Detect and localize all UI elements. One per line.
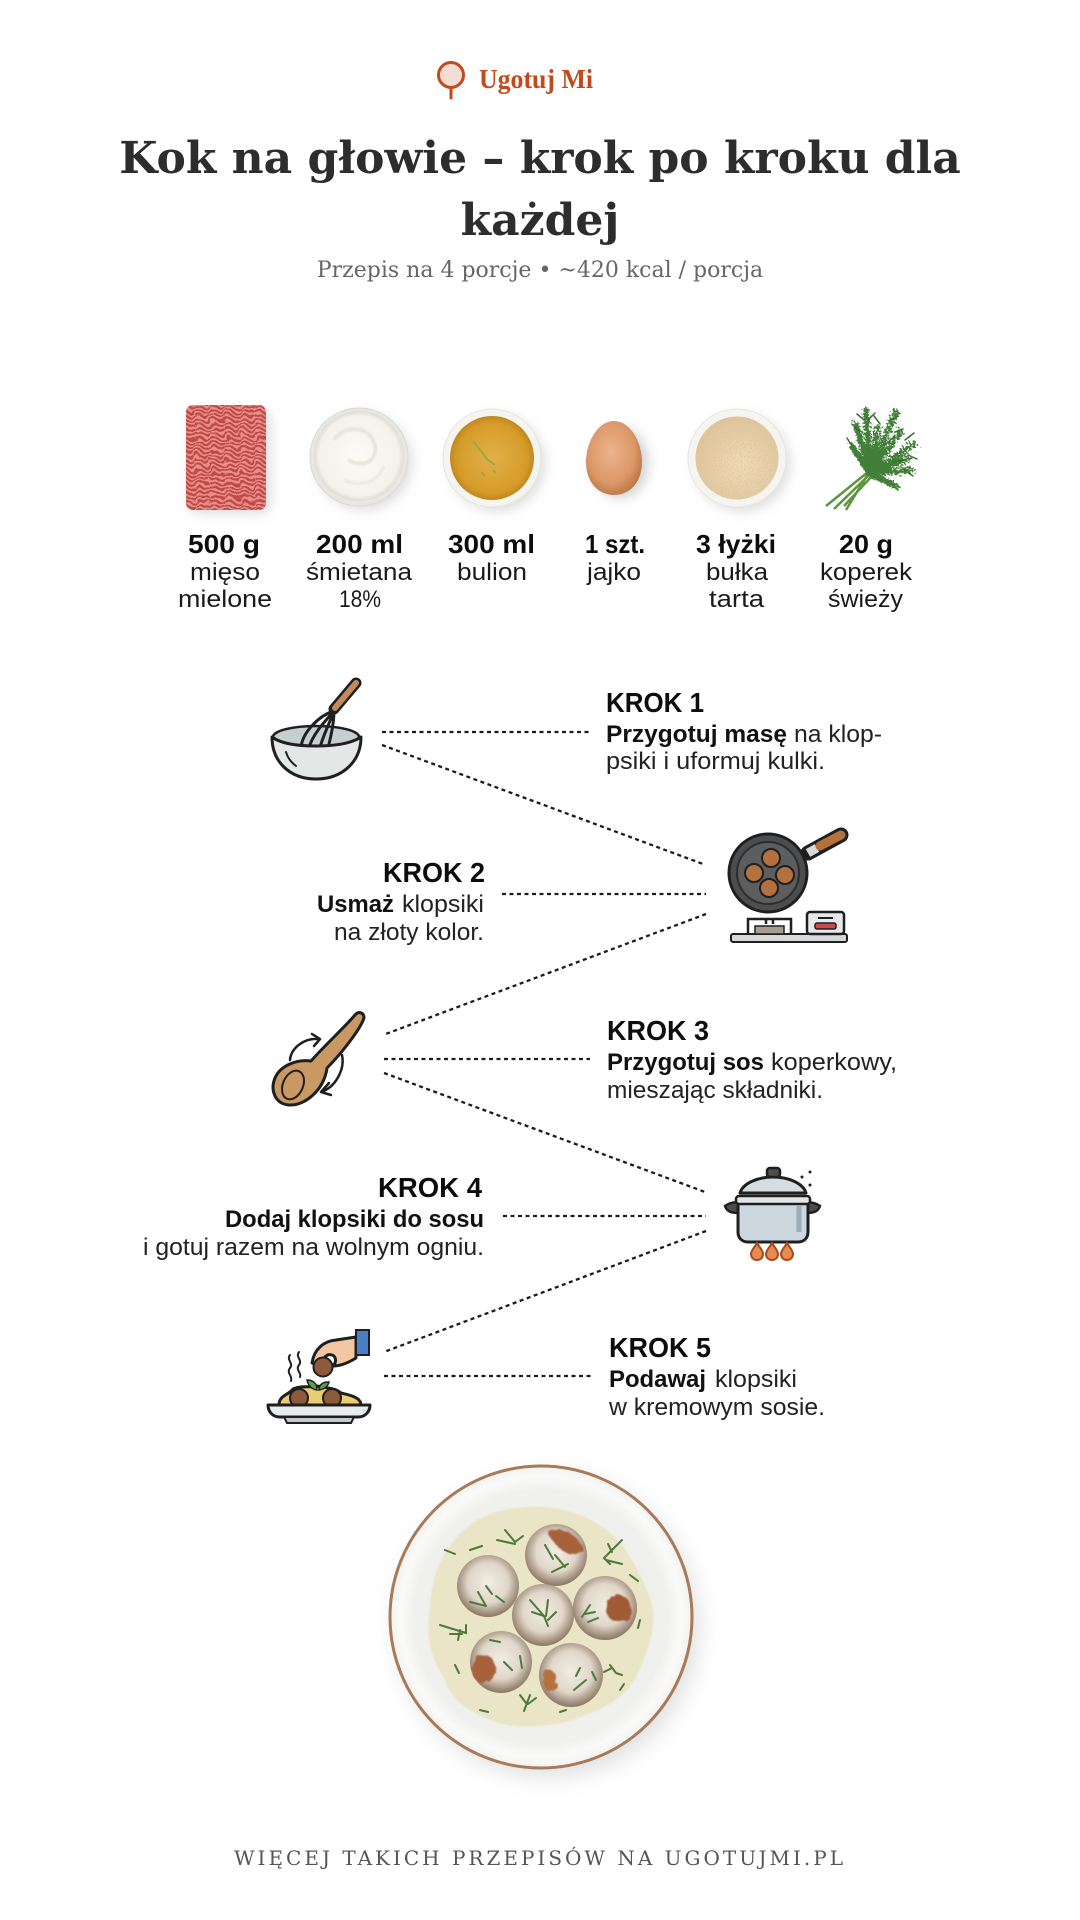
step 1 text: Przygotuj masę: [606, 721, 787, 748]
ingredient: bread crumbs: tarta: [709, 586, 765, 613]
step 4 text: KROK 4: [378, 1172, 482, 1203]
icon: whisk and bowl: [272, 683, 361, 779]
ingredients row: [176, 396, 917, 613]
ingredient: fresh dill: koperek: [820, 559, 913, 586]
step 3 text: KROK 3: [607, 1015, 709, 1046]
step 3: [273, 1013, 897, 1105]
ingredient: egg: 1 szt.: [585, 529, 645, 559]
step 3 text: Przygotuj sos: [607, 1049, 764, 1076]
step 1 text: na klop-: [794, 721, 882, 748]
step 4: [143, 1168, 820, 1261]
step 3 text: mieszając składniki.: [607, 1077, 823, 1104]
ingredient: egg: jajko: [586, 559, 641, 586]
icon: pot over flames: [725, 1168, 820, 1260]
step 5: [268, 1330, 825, 1423]
logo: [438, 62, 593, 98]
step 2 text: Usmaż: [317, 891, 394, 918]
title: [119, 133, 961, 246]
step 2 text: na złoty kolor.: [334, 919, 484, 946]
step 2 text: [317, 857, 485, 946]
footer: WIĘCEJ TAKICH PRZEPISÓW NA UGOTUJMI.PL: [234, 1845, 846, 1870]
ingredient: fresh dill: 20 g: [839, 529, 893, 559]
step 5 text: klopsiki: [715, 1366, 797, 1393]
ingredient: sour cream: śmietana: [306, 559, 413, 586]
icon: hand serving meatball on plate: [268, 1330, 370, 1423]
connector lines: [382, 732, 706, 1376]
title: Kok na głowie – krok po kroku dla: [119, 133, 961, 184]
step 5 text: [608, 1332, 825, 1421]
ingredient: fresh dill: świeży: [828, 586, 903, 613]
ingredient: sour cream: 18%: [339, 586, 381, 613]
step 2 text: KROK 2: [383, 857, 485, 888]
ingredient: bread crumbs: [688, 409, 790, 613]
sauce: [428, 1507, 653, 1726]
subtitle: Przepis na 4 porcje • ~420 kcal / porcja: [317, 258, 763, 283]
step 1 text: KROK 1: [606, 687, 704, 718]
meatballs: [457, 1524, 637, 1707]
step 1 text: psiki i uformuj kulki.: [606, 748, 825, 775]
icon: logo spoon: [438, 62, 464, 98]
ingredient: broth: bulion: [457, 559, 527, 586]
icon: wooden spoon with stirring arrows: [273, 1013, 364, 1105]
ingredient: broth: [443, 409, 545, 586]
step 1 text: [606, 687, 882, 775]
finished dish: meatballs in dill sauce: [390, 1466, 698, 1776]
step 5 text: KROK 5: [609, 1332, 711, 1363]
ingredient: fresh dill: [820, 410, 917, 613]
dill garnish: [440, 1530, 640, 1712]
step 2: [317, 834, 847, 946]
ingredient: bread crumbs: 3 łyżki: [696, 529, 776, 559]
ingredient: minced meat: [180, 405, 274, 607]
logo: Ugotuj Mi: [479, 64, 593, 94]
step 2 text: klopsiki: [402, 891, 484, 918]
ingredient: minced meat: mielone: [178, 586, 272, 613]
ingredient: sour cream: 200 ml: [316, 529, 403, 559]
ingredient: egg: [585, 421, 648, 586]
ingredient: minced meat: 500 g: [188, 529, 260, 559]
ingredient: minced meat: mięso: [190, 559, 260, 586]
step 4 text: [143, 1172, 484, 1261]
ingredient: bread crumbs: bułka: [706, 559, 769, 586]
ingredient: broth: 300 ml: [448, 529, 535, 559]
step 4 text: i gotuj razem na wolnym ogniu.: [143, 1234, 484, 1261]
step 3 text: koperkowy,: [771, 1049, 897, 1076]
step 4 text: Dodaj klopsiki do sosu: [225, 1206, 484, 1233]
ingredient: sour cream: [306, 408, 413, 613]
step 3 text: [607, 1015, 897, 1104]
title: każdej: [461, 195, 619, 246]
icon: frying pan on stove: [729, 834, 847, 942]
step 5 text: w kremowym sosie.: [608, 1394, 825, 1421]
step 1: [272, 683, 882, 779]
step 5 text: Podawaj: [609, 1366, 706, 1393]
